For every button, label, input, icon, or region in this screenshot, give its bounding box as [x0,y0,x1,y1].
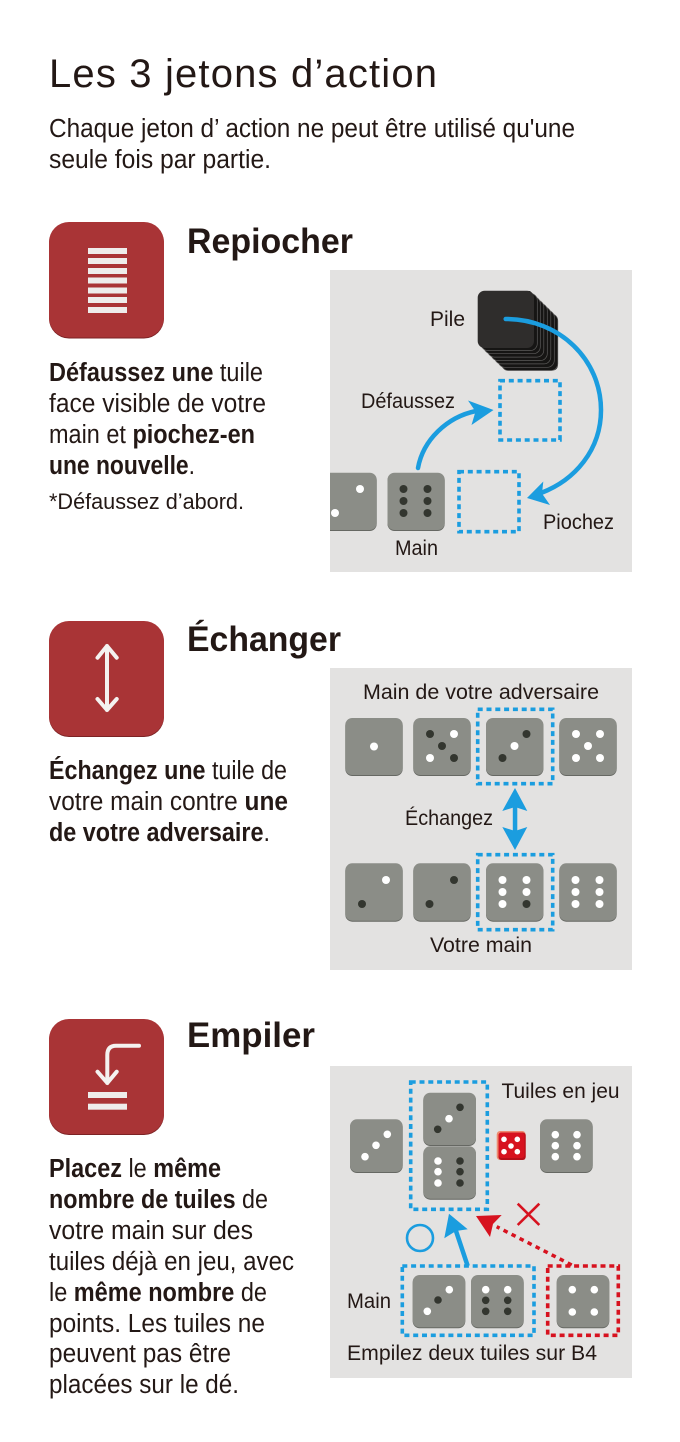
icon: valid circle [407,1225,433,1251]
label: Piochez: Piochez [543,510,614,534]
description: Empiler: points. Les tuiles ne [49,1310,265,1338]
icon: red die [497,1131,526,1160]
description: Repiocher: une nouvelle. [49,452,195,480]
label: Défaussez: Défaussez [361,389,455,413]
label: Main de votre adversaire: Main de votre adversaire [363,680,599,704]
selection: invalid tile [548,1266,618,1335]
icon: échanger token [49,621,164,736]
tile: own 2 mixed [345,863,403,921]
selection: opponent tile [478,709,553,784]
section: Échanger [49,619,632,970]
arrow: exchange [502,788,527,850]
tile: hand 3 [413,1275,465,1327]
intro text [49,115,575,174]
label: Tuiles en jeu: Tuiles en jeu [502,1079,620,1103]
tile: in play 3 [350,1119,403,1172]
tile: opponent 5 mixed [413,718,471,775]
intro text: Chaque jeton d’ action ne peut être utilisé qu'une [49,115,575,143]
tile: opponent 1 [345,718,403,775]
description: Empiler: nombre de tuiles de [49,1186,268,1214]
selection: target stack [411,1082,487,1209]
label: Main: Main [395,536,438,560]
description: Repiocher: Défaussez une tuile [49,359,263,387]
description: Échanger: votre main contre une [49,788,288,816]
tile: hand 4 [557,1275,609,1327]
tile: in play 6 [540,1119,593,1172]
tile: stack top 3 [423,1093,476,1145]
heading: Empiler: Empiler [187,1016,315,1055]
section: Repiocher [49,222,632,572]
description: Empiler: Placez le même [49,1155,221,1183]
icon: empiler token [49,1019,164,1134]
arrow: invalid move [476,1215,572,1265]
label: Votre main: Votre main [430,933,532,957]
icon: draw pile [478,291,558,370]
intro text: seule fois par partie. [49,146,271,174]
description: Échanger [49,756,288,847]
description: Empiler: placées sur le dé. [49,1371,239,1399]
tile: hand 6 [471,1275,524,1327]
heading: Repiocher: Repiocher [187,222,353,261]
tile: own 6 white [559,863,617,921]
label: Pile: Pile [430,307,465,331]
icon: repiocher token [49,222,164,338]
title: Les 3 jetons d’action [49,52,437,96]
icon: invalid cross [518,1204,539,1225]
arrow: valid move [444,1214,468,1266]
description: Repiocher: main et piochez-en [49,421,255,449]
description: Empiler: peuvent pas être [49,1340,231,1368]
description: Empiler [49,1155,294,1399]
tile: own 2 dark [413,863,471,921]
heading: Échanger: Échanger [187,619,341,659]
tile: stack bottom 6 [423,1146,476,1199]
description: Échanger: Échangez une tuile de [49,756,287,785]
description: Empiler: le même nombre de [49,1279,267,1307]
description: Repiocher: face visible de votre [49,390,266,418]
label: Main: Main [347,1289,391,1313]
label: Empilez deux tuiles sur B4: Empilez deux tuiles sur B4 [347,1341,597,1365]
arrow: main to discard slot [418,400,494,468]
description: Empiler: votre main sur des [49,1217,253,1245]
tile: two dots, clipped [330,472,377,531]
tile: opponent 3 [486,718,543,775]
description: Échanger: de votre adversaire. [49,819,270,847]
description: Empiler: tuiles déjà en jeu, avec [49,1248,294,1276]
selection: hand tiles [402,1266,534,1335]
panel: repiocher diagram [320,270,632,572]
label: Échangez: Échangez [405,805,493,830]
description: Repiocher: *Défaussez d’abord. [49,489,244,514]
description: Repiocher [49,359,266,514]
tile: opponent 5 white [559,718,617,775]
discard slot [500,381,560,440]
arrow: pile to draw slot [506,319,601,505]
selection: own tile [478,855,553,930]
tile: own 6 mixed [486,863,543,921]
section: Empiler [49,1016,632,1399]
panel: échanger diagram [330,668,632,970]
tile: six dark dots [388,473,445,530]
draw slot [459,472,519,532]
panel: empiler diagram [330,1066,632,1378]
